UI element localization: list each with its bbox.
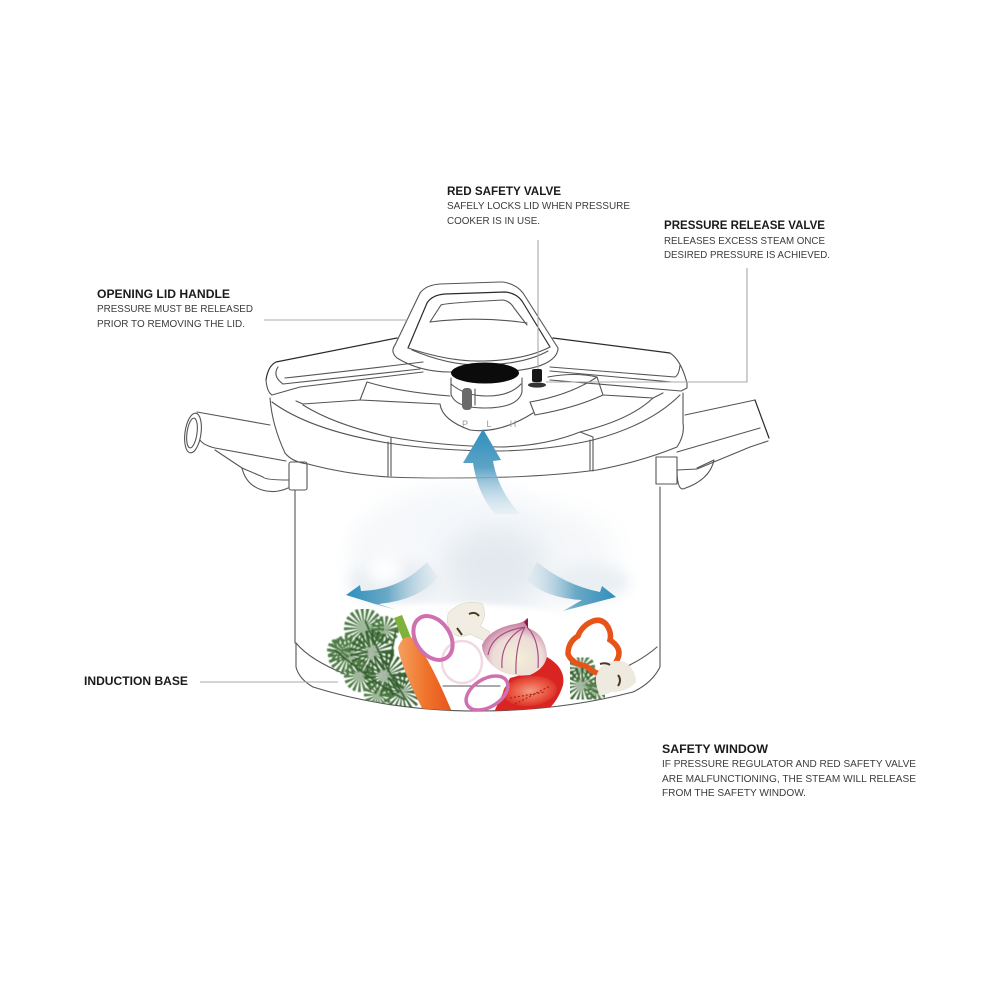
steam cloud — [340, 487, 630, 632]
red safety valve knob — [528, 369, 546, 388]
label: induction base: INDUCTION BASE — [84, 674, 188, 688]
label: safety window: IF PRESSURE REGULATOR AND RED SAFETY VALVE — [662, 759, 916, 770]
carrot — [394, 615, 452, 712]
onion ring bottom — [464, 674, 510, 711]
label: pressure release valve: PRESSURE RELEASE VALVE — [664, 218, 825, 232]
food group — [333, 602, 636, 717]
label: opening lid handle: PRIOR TO REMOVING THE LID. — [97, 319, 245, 330]
left side handle — [182, 412, 288, 492]
leader lines — [200, 240, 747, 682]
label: pressure release valve: RELEASES EXCESS STEAM ONCE — [664, 236, 825, 247]
arrow: steam flowing left — [346, 562, 438, 610]
pale onion ring — [442, 641, 482, 683]
lid arms — [266, 338, 687, 395]
tomato — [494, 657, 563, 712]
pressure dial: L — [486, 419, 492, 429]
label: red safety valve: RED SAFETY VALVE — [447, 184, 561, 198]
label: safety window — [662, 742, 916, 799]
label: safety window: ARE MALFUNCTIONING, THE STEAM WILL RELEASE — [662, 774, 916, 785]
arrow: steam flowing right — [527, 562, 616, 611]
mushroom lower — [596, 661, 636, 696]
mushroom upper — [447, 602, 490, 642]
label: opening lid handle: PRESSURE MUST BE RELEASED — [97, 304, 253, 315]
label: safety window: SAFETY WINDOW — [662, 742, 769, 756]
bell pepper ring — [568, 620, 619, 674]
label: pressure release valve: DESIRED PRESSURE IS ACHIEVED. — [664, 250, 830, 261]
right side handle — [677, 400, 769, 489]
arrow: steam rising — [463, 429, 520, 514]
label: opening lid handle: OPENING LID HANDLE — [97, 287, 230, 301]
label: safety window: FROM THE SAFETY WINDOW. — [662, 788, 806, 799]
pressure cooker infographic — [84, 186, 916, 796]
red onion half — [482, 618, 547, 676]
pot body outline — [295, 487, 660, 711]
onion ring top — [411, 614, 455, 662]
label: red safety valve — [447, 184, 630, 227]
pressure dial — [451, 362, 522, 429]
label: red safety valve: COOKER IS IN USE. — [447, 216, 540, 227]
side brackets — [289, 457, 677, 490]
raised lid plate — [360, 374, 603, 431]
pressure dial: P — [462, 419, 468, 429]
label: pressure release valve — [664, 218, 830, 261]
lid body — [270, 393, 683, 478]
dill sprig right — [573, 661, 602, 696]
lid handle — [393, 282, 558, 372]
label: red safety valve: SAFELY LOCKS LID WHEN PRESSURE — [447, 201, 630, 212]
label: opening lid handle — [97, 287, 253, 330]
dill sprig left — [333, 618, 412, 705]
pressure dial: H — [510, 419, 516, 429]
